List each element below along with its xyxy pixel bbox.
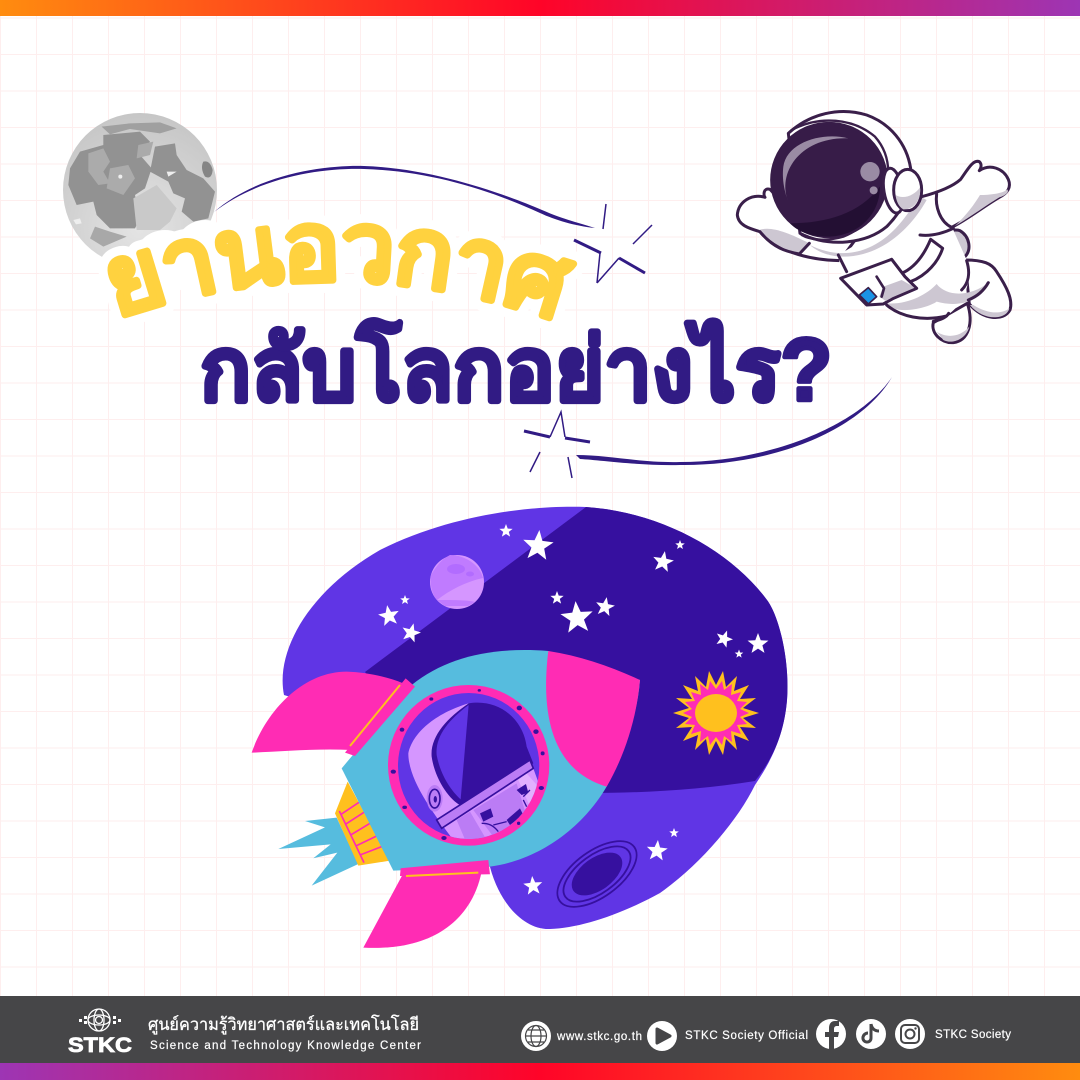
rocket top fin (252, 672, 403, 753)
icon: globe (521, 1021, 551, 1051)
footer bar (0, 996, 1080, 1080)
star outline: upper (574, 204, 652, 283)
astronaut waist ring (902, 239, 943, 283)
logo: STKC (68, 1009, 132, 1057)
astronaut visor (772, 123, 886, 237)
youtube label: STKC Society Official (685, 1030, 808, 1042)
astronaut upper leg (965, 260, 1011, 318)
rocket window rivets (391, 689, 545, 840)
logo: STKC: STKC (68, 1034, 132, 1057)
star outline: lower (524, 412, 590, 478)
icon: sun (673, 671, 759, 755)
astronaut lower leg (933, 303, 970, 343)
icon: youtube play (647, 1021, 677, 1051)
panel: space blob background (283, 507, 787, 929)
icon: ringed planet (546, 828, 648, 920)
astronaut chest pack (841, 259, 917, 305)
astronaut hip (928, 230, 969, 257)
footer org name English: Science and Technology Knowledge Center (150, 1040, 421, 1052)
astronaut left arm (737, 189, 860, 261)
swoosh: upper arc (214, 166, 595, 228)
top gradient bar (0, 0, 1080, 16)
astronaut helmet (788, 111, 911, 242)
icon: facebook (816, 1019, 846, 1049)
rocket window astronaut (408, 703, 540, 843)
website: www.stkc.go.th (556, 1031, 642, 1043)
icon: tiktok (856, 1019, 886, 1049)
icon: instagram (895, 1019, 925, 1049)
blob light purple (283, 507, 787, 929)
icon: stars (377, 524, 768, 895)
icon: rocket (252, 650, 640, 948)
swoosh: lower arc (576, 377, 892, 465)
icon: small planet (430, 555, 484, 609)
rocket engine (335, 782, 390, 866)
icon: moon (63, 113, 217, 267)
heading: yellow curved title: ยานอวกาศ (99, 214, 582, 328)
rocket bottom fin (363, 872, 482, 948)
rocket body (342, 650, 640, 871)
rocket nose (546, 651, 640, 787)
footer org name Thai: ศูนย์ความรู้วิทยาศาสตร์และเทคโนโลยี (148, 1014, 419, 1035)
bottom gradient bar (0, 1063, 1080, 1080)
heading: yellow curved title: ยานอวกาศ (108, 222, 578, 322)
rocket window frame (388, 685, 549, 846)
heading: dark title: กลับโลกอย่างไร? (200, 319, 832, 419)
astronaut right arm (922, 161, 1009, 227)
icon: astronaut (737, 111, 1011, 343)
astronaut ear piece (880, 167, 906, 215)
rocket flames (278, 818, 358, 886)
astronaut torso (838, 193, 968, 318)
blob dark upper (365, 507, 787, 793)
instagram label: STKC Society (935, 1029, 1011, 1041)
